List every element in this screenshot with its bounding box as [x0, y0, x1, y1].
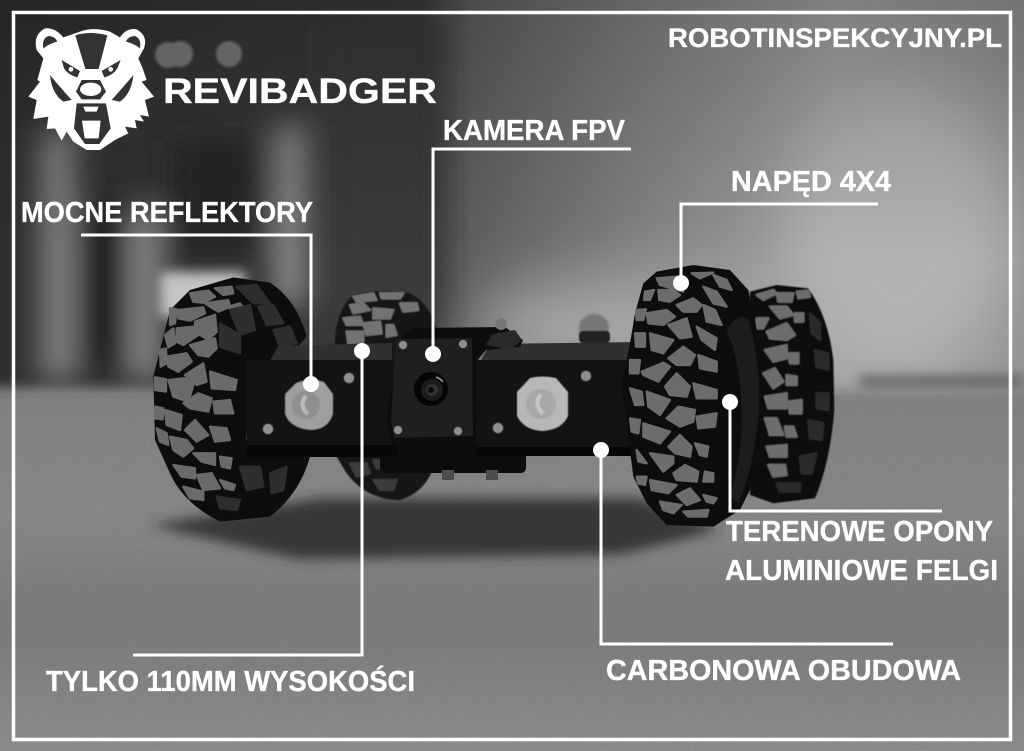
callout: headlights: MOCNE REFLEKTORY	[21, 197, 313, 229]
callout: 4x4 drive	[673, 166, 891, 291]
right housing	[476, 360, 632, 450]
rear left tyre	[335, 291, 438, 500]
callout: height: TYLKO 110MM WYSOKOŚCI	[46, 664, 415, 698]
callout: headlights	[21, 197, 319, 392]
callout: tyres and rims	[722, 394, 998, 587]
left housing	[247, 360, 395, 448]
logo wordmark: REVIBADGER	[163, 72, 437, 111]
camera lens	[414, 372, 448, 406]
callout: tyres and rims: ALUMINIOWE FELGI	[725, 555, 998, 587]
lower chassis	[380, 440, 526, 473]
screws	[262, 340, 592, 436]
callout: camera: KAMERA FPV	[443, 115, 626, 147]
robot body	[247, 314, 635, 480]
callout: carbon housing: CARBONOWA OBUDOWA	[606, 655, 961, 687]
callout: carbon housing	[593, 442, 961, 687]
logo: badger head	[28, 28, 154, 150]
website address: ROBOTINSPEKCYJNY.PL	[668, 23, 1002, 53]
robot	[153, 265, 834, 527]
rear camera bracket	[386, 327, 523, 445]
top face	[270, 343, 392, 362]
left front tyre	[153, 277, 310, 522]
left headlight	[285, 380, 333, 430]
callout: camera	[425, 115, 631, 362]
callout: tyres and rims: TERENOWE OPONY	[726, 516, 993, 548]
callout: height	[46, 343, 415, 698]
callout: 4x4 drive: NAPĘD 4X4	[731, 166, 891, 198]
camera plate	[391, 338, 473, 438]
rear right tyre	[750, 285, 834, 503]
right front tyre	[622, 265, 762, 527]
right headlight	[517, 376, 568, 431]
rear pivot	[579, 314, 609, 340]
